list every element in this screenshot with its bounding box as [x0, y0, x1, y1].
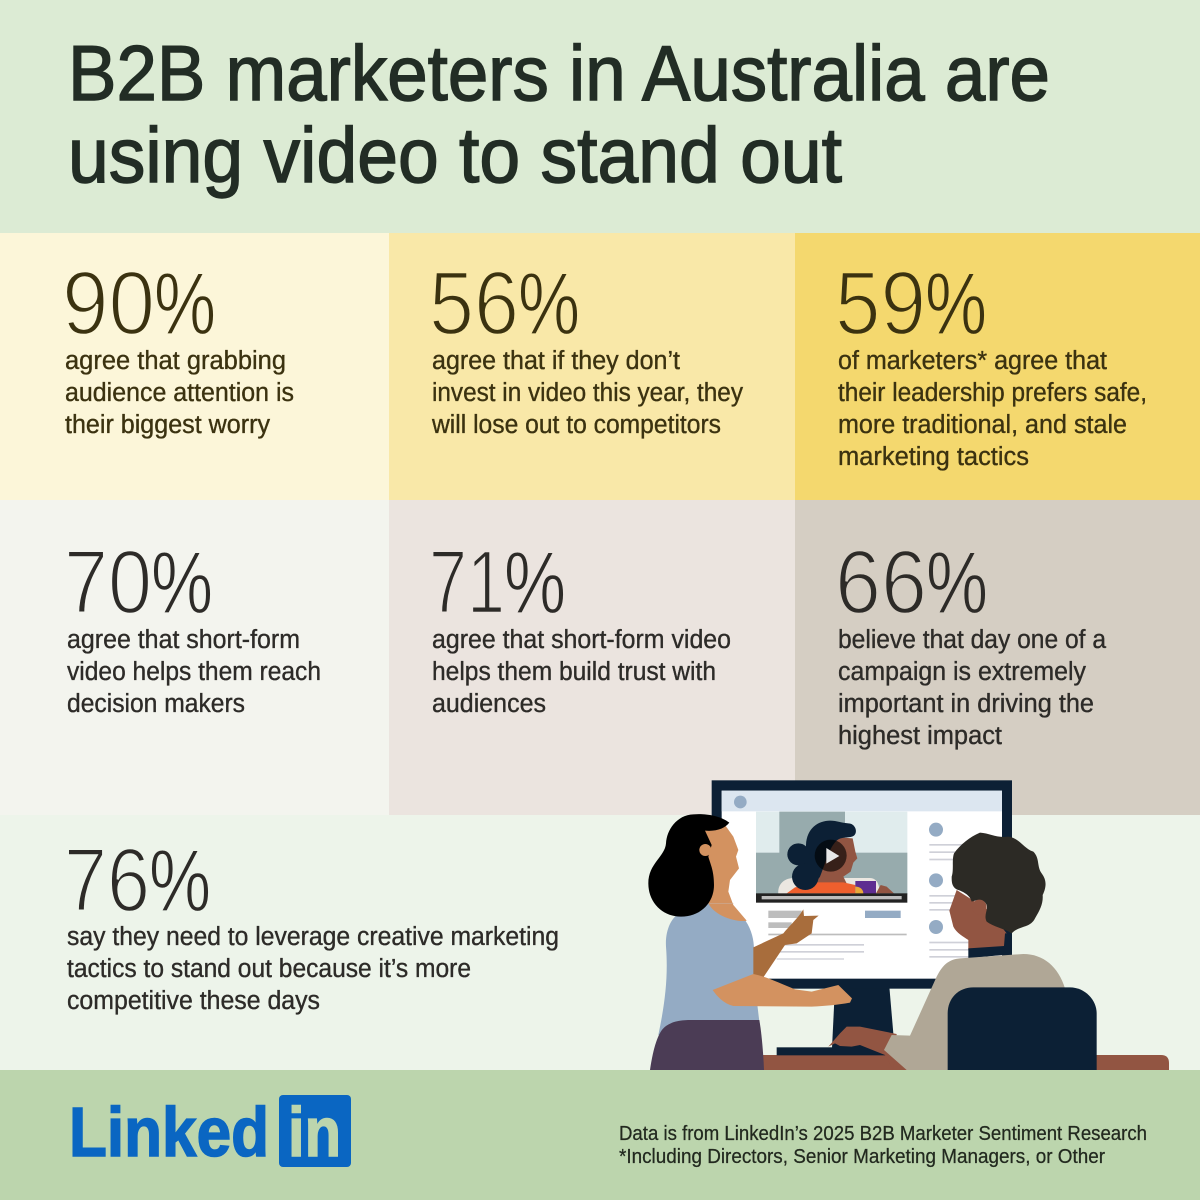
page content lines: [768, 911, 802, 918]
monitor: [712, 780, 1012, 1055]
desk: [763, 1055, 1169, 1070]
panel: 70% stat: agree that short-form: [67, 626, 300, 654]
panel: 70% stat: %: [151, 533, 213, 632]
panel: 71% stat: 71: [429, 533, 505, 633]
panel: 70% stat: video helps them reach: [67, 658, 321, 686]
woman: [648, 814, 852, 1070]
panel: 66% stat: %: [926, 533, 988, 632]
panel: 66% stat: 66: [835, 533, 927, 633]
source note: Data is from LinkedIn’s 2025 B2B Marketer Sentiment Research: [619, 1123, 1147, 1145]
panel: 56% stat: invest in video this year, they: [432, 379, 743, 407]
panel: 70% stat: [0, 500, 389, 815]
panel: 59% stat: their leadership prefers safe,: [838, 379, 1147, 407]
panel: 76% stat: say they need to leverage creative marketing: [67, 923, 559, 951]
panel: 71% stat: agree that short-form video: [432, 626, 731, 654]
panel: 71% stat: helps them build trust with: [432, 658, 716, 686]
source note: *Including Directors, Senior Marketing Managers, or Other: [619, 1146, 1105, 1168]
panel: 66% stat: important in driving the: [838, 690, 1094, 718]
hand on keyboard: [828, 1027, 897, 1070]
panel: 59% stat: 59: [835, 254, 926, 354]
panel: 90% stat: 90: [62, 254, 155, 354]
panel: 70% stat: decision makers: [67, 690, 245, 718]
panel: 90% stat: %: [154, 254, 216, 353]
panel: 56% stat: %: [518, 254, 580, 353]
panel: 66% stat: campaign is extremely: [838, 658, 1086, 686]
panel: 59% stat: [795, 233, 1200, 500]
header panel: [0, 0, 1200, 233]
panel: 59% stat: of marketers* agree that: [838, 347, 1107, 375]
title: [68, 29, 1050, 199]
title: B2B marketers in Australia are: [68, 29, 1050, 117]
panel: 90% stat: their biggest worry: [65, 411, 270, 439]
panel: 76% stat: tactics to stand out because it’s more: [67, 955, 471, 983]
LinkedIn logo: in: [288, 1093, 341, 1171]
panel: 76% stat: [0, 815, 1200, 1070]
panel: 56% stat: [389, 233, 795, 500]
title: using video to stand out: [68, 111, 842, 199]
source note: [619, 1123, 1147, 1168]
panel: 59% stat: marketing tactics: [838, 443, 1029, 471]
panel: 90% stat: audience attention is: [65, 379, 294, 407]
panel: 76% stat: %: [149, 831, 211, 930]
panel: 56% stat: agree that if they don’t: [432, 347, 680, 375]
panel: 90% stat: agree that grabbing: [65, 347, 286, 375]
video player: [756, 812, 907, 903]
LinkedIn logo: Linked: [69, 1093, 269, 1171]
monitor sidebar: [929, 823, 973, 958]
panel: 71% stat: audiences: [432, 690, 546, 718]
panel: 90% stat: [0, 233, 389, 500]
panel: 70% stat: 70: [64, 533, 152, 633]
panel: 59% stat: more traditional, and stale: [838, 411, 1127, 439]
panel: 76% stat: 76: [64, 831, 150, 931]
panel: 56% stat: will lose out to competitors: [431, 411, 721, 439]
panel: 66% stat: [795, 500, 1200, 815]
head and body: [884, 833, 1097, 1070]
panel: 71% stat: [389, 500, 795, 815]
footer panel: [0, 1070, 1200, 1200]
panel: 56% stat: 56: [429, 254, 519, 354]
panel: 66% stat: believe that day one of a: [838, 626, 1107, 654]
man: [828, 833, 1097, 1070]
panel: 59% stat: %: [925, 254, 987, 353]
panel: 76% stat: competitive these days: [67, 987, 320, 1015]
illustration: two people watching video on monitor: [648, 780, 1169, 1070]
panel: 66% stat: highest impact: [838, 722, 1002, 750]
panel: 71% stat: %: [504, 533, 566, 632]
